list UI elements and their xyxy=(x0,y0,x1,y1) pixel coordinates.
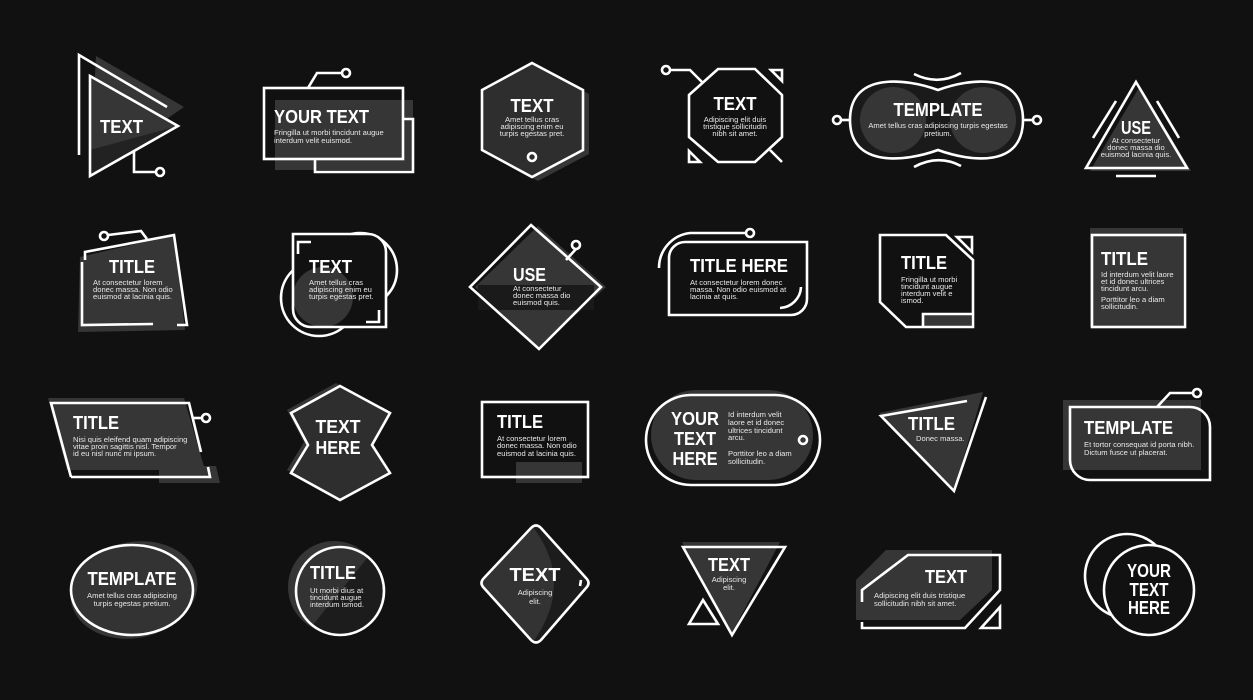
badge: diamond USE: euismod quis. xyxy=(513,298,560,307)
badge: tilted TITLE: donec massa. Non odio xyxy=(93,285,173,294)
badge: rounded TEMPLATE xyxy=(1063,389,1210,480)
badge: play triangle TEXT xyxy=(79,55,184,176)
badge: triangle USE: USE xyxy=(1121,118,1151,138)
badge: square with circles TEXT: adipiscing enim eu xyxy=(309,285,372,294)
badge: TITLE HERE rounded: lacinia at quis. xyxy=(690,292,738,301)
badge: rectangle TITLE: donec massa. Non odio xyxy=(497,441,577,450)
badge: parallelogram TITLE: TITLE xyxy=(73,413,119,433)
badge: pill YOUR TEXT HERE: TEXT xyxy=(674,429,716,449)
badge: octagon TEXT: TEXT xyxy=(714,94,756,114)
badge: peanut TEMPLATE: pretium. xyxy=(924,129,952,138)
badge: parallelogram TITLE: vitae proin sagittis nisl. Tempor xyxy=(73,442,177,451)
badge: triangle USE: euismod lacinia quis. xyxy=(1101,150,1171,159)
badge: pill YOUR TEXT HERE: laore et id donec xyxy=(728,418,784,427)
badge: cut corner TITLE xyxy=(880,235,973,327)
badge: rounded TEMPLATE: TEMPLATE xyxy=(1084,418,1173,438)
badge: rectangle TITLE: TITLE xyxy=(497,412,543,432)
badge: diamond USE: donec massa dio xyxy=(513,291,570,300)
badge: rectangle TITLE: At consectetur lorem xyxy=(497,434,567,443)
badge: angled TEXT: sollicitudin nibh sit amet. xyxy=(874,599,956,608)
badge: cut corner TITLE: TITLE xyxy=(901,253,947,273)
badge: square with circles TEXT: Amet tellus cras xyxy=(309,278,363,287)
badge: square with circles TEXT: turpis egestas pret. xyxy=(309,292,374,301)
badge: triangle USE: At consectetur xyxy=(1112,136,1161,145)
badge: pill YOUR TEXT HERE: Porttitor leo a diam xyxy=(728,449,792,458)
badge: cut corner TITLE: interdum velit e xyxy=(901,289,952,298)
badge: rectangle TITLE: euismod at lacinia quis. xyxy=(497,449,576,458)
badge: hexagon TEXT: adipiscing enim eu xyxy=(501,122,563,131)
badge: circle TITLE: tincidunt augue xyxy=(310,593,362,602)
badge: diamond USE: USE xyxy=(513,265,546,285)
badge: square TITLE: TITLE xyxy=(1101,249,1148,269)
badge: YOUR TEXT rectangle xyxy=(264,69,413,172)
badge: square TITLE xyxy=(1090,228,1185,327)
badge: TITLE HERE rounded xyxy=(659,229,807,315)
badge: YOUR TEXT rectangle: interdum velit euismod. xyxy=(274,136,352,145)
badge: angled TEXT: Adipiscing elit duis tristique xyxy=(874,591,965,600)
badge: square TITLE: tincidunt arcu. xyxy=(1101,284,1148,293)
badge: ellipse TEMPLATE xyxy=(61,530,207,650)
badge: triangle USE: donec massa dio xyxy=(1107,143,1165,152)
badge: angled TEXT: TEXT xyxy=(925,567,967,587)
badge: tilted TITLE: At consectetur lorem xyxy=(93,278,163,287)
badge: angled TEXT xyxy=(856,550,1000,628)
badge: triangle USE xyxy=(1086,82,1191,176)
badge: rounded diamond TEXT xyxy=(482,526,588,642)
badge: octagon TEXT: tristique sollicitudin xyxy=(703,122,767,131)
badge: square with circles TEXT xyxy=(281,233,397,336)
badge: hexagon TEXT: turpis egestas pret. xyxy=(500,129,564,138)
badge: rounded TEMPLATE: Dictum fusce ut placerat. xyxy=(1084,448,1168,457)
badge: TITLE HERE rounded: massa. Non odio euismod at xyxy=(690,285,787,294)
badge: double circle YOUR TEXT HERE xyxy=(1085,534,1194,635)
badge: hexagon TEXT: Amet tellus cras xyxy=(505,115,559,124)
badge: peanut TEMPLATE xyxy=(833,73,1041,167)
badge: triangle TITLE: Donec massa. xyxy=(916,434,965,443)
badge: pill YOUR TEXT HERE: ultrices tincidunt xyxy=(728,426,783,435)
badge: cut corner TITLE: ismod. xyxy=(901,296,923,305)
badge: rounded TEMPLATE: Et tortor consequat id porta nibh. xyxy=(1084,440,1194,449)
badge: rounded diamond TEXT: elit. xyxy=(529,597,541,606)
badge: ellipse TEMPLATE: turpis egestas pretium. xyxy=(94,599,170,608)
badge: octagon TEXT: Adipiscing elit duis xyxy=(704,115,766,124)
badge: cut corner TITLE: Fringilla ut morbi xyxy=(901,275,957,284)
badge: peanut TEMPLATE: Amet tellus cras adipiscing turpis egestas xyxy=(868,121,1008,130)
badge: pill YOUR TEXT HERE: arcu. xyxy=(728,433,745,442)
badge: parallelogram TITLE xyxy=(48,398,220,483)
badge: hourglass TEXT HERE xyxy=(287,383,390,500)
badge: ellipse TEMPLATE: Amet tellus cras adipiscing xyxy=(87,591,177,600)
badge: square TITLE: Porttitor leo a diam xyxy=(1101,295,1165,304)
badge: ellipse TEMPLATE: TEMPLATE xyxy=(88,569,176,589)
badge: square TITLE: sollicitudin. xyxy=(1101,302,1138,311)
badge: diamond USE xyxy=(470,225,606,349)
badge: hexagon TEXT: TEXT xyxy=(510,96,554,116)
badge: YOUR TEXT rectangle: Fringilla ut morbi tincidunt augue xyxy=(274,128,384,137)
badge: tilted TITLE: TITLE xyxy=(109,257,155,277)
badge: circle TITLE xyxy=(288,541,384,635)
badge: play triangle TEXT: TEXT xyxy=(100,117,143,137)
badge: TITLE HERE rounded: TITLE HERE xyxy=(690,256,788,276)
badge: circle TITLE: Ut morbi dius at xyxy=(310,586,364,595)
badge: inverted triangle TEXT: TEXT xyxy=(708,555,750,575)
badge: diamond USE: At consectetur xyxy=(513,284,562,293)
badge: pill YOUR TEXT HERE: YOUR xyxy=(671,409,719,429)
badge: double circle YOUR TEXT HERE: YOUR xyxy=(1127,561,1171,581)
badge: pill YOUR TEXT HERE: sollicitudin. xyxy=(728,457,765,466)
badge: pill YOUR TEXT HERE xyxy=(646,390,820,485)
badge: pill YOUR TEXT HERE: Id interdum velit xyxy=(728,410,782,419)
badge: square with circles TEXT: TEXT xyxy=(309,257,352,277)
badge: square TITLE: et id donec ultrices xyxy=(1101,277,1165,286)
badge: cut corner TITLE: tincidunt augue xyxy=(901,282,953,291)
badge: tilted TITLE: euismod at lacinia quis. xyxy=(93,292,172,301)
badge: triangle TITLE xyxy=(879,392,986,491)
badge: tilted TITLE xyxy=(78,231,187,332)
badge: hourglass TEXT HERE: TEXT xyxy=(316,417,360,437)
badge: pill YOUR TEXT HERE: HERE xyxy=(672,449,718,469)
badge: inverted triangle TEXT: elit. xyxy=(723,583,735,592)
badge: double circle YOUR TEXT HERE: TEXT xyxy=(1130,580,1168,600)
badge: triangle TITLE: TITLE xyxy=(908,414,955,434)
badge: rounded diamond TEXT: Adipiscing xyxy=(518,588,552,597)
badge: rectangle TITLE xyxy=(482,402,588,483)
badge: hexagon TEXT xyxy=(482,63,589,181)
badge: parallelogram TITLE: Nisi quis eleifend quam adipiscing xyxy=(73,435,187,444)
badge: rounded diamond TEXT: TEXT xyxy=(510,565,560,585)
badge: YOUR TEXT rectangle: YOUR TEXT xyxy=(274,107,369,127)
badge: octagon TEXT: nibh sit amet. xyxy=(712,129,758,138)
badge: circle TITLE: TITLE xyxy=(310,563,356,583)
badge: hourglass TEXT HERE: HERE xyxy=(316,438,360,458)
badge: circle TITLE: interdum ismod. xyxy=(310,600,364,609)
badge: inverted triangle TEXT xyxy=(682,542,785,635)
badge: square TITLE: Id interdum velit laore xyxy=(1101,270,1174,279)
badge: octagon TEXT xyxy=(662,66,782,162)
badge: parallelogram TITLE: id eu nisl nunc mi ipsum. xyxy=(73,449,156,458)
badge: peanut TEMPLATE: TEMPLATE xyxy=(894,100,982,120)
badge: inverted triangle TEXT: Adipiscing xyxy=(712,575,746,584)
badge: TITLE HERE rounded: At consectetur lorem donec xyxy=(690,278,783,287)
badge: double circle YOUR TEXT HERE: HERE xyxy=(1128,598,1170,618)
